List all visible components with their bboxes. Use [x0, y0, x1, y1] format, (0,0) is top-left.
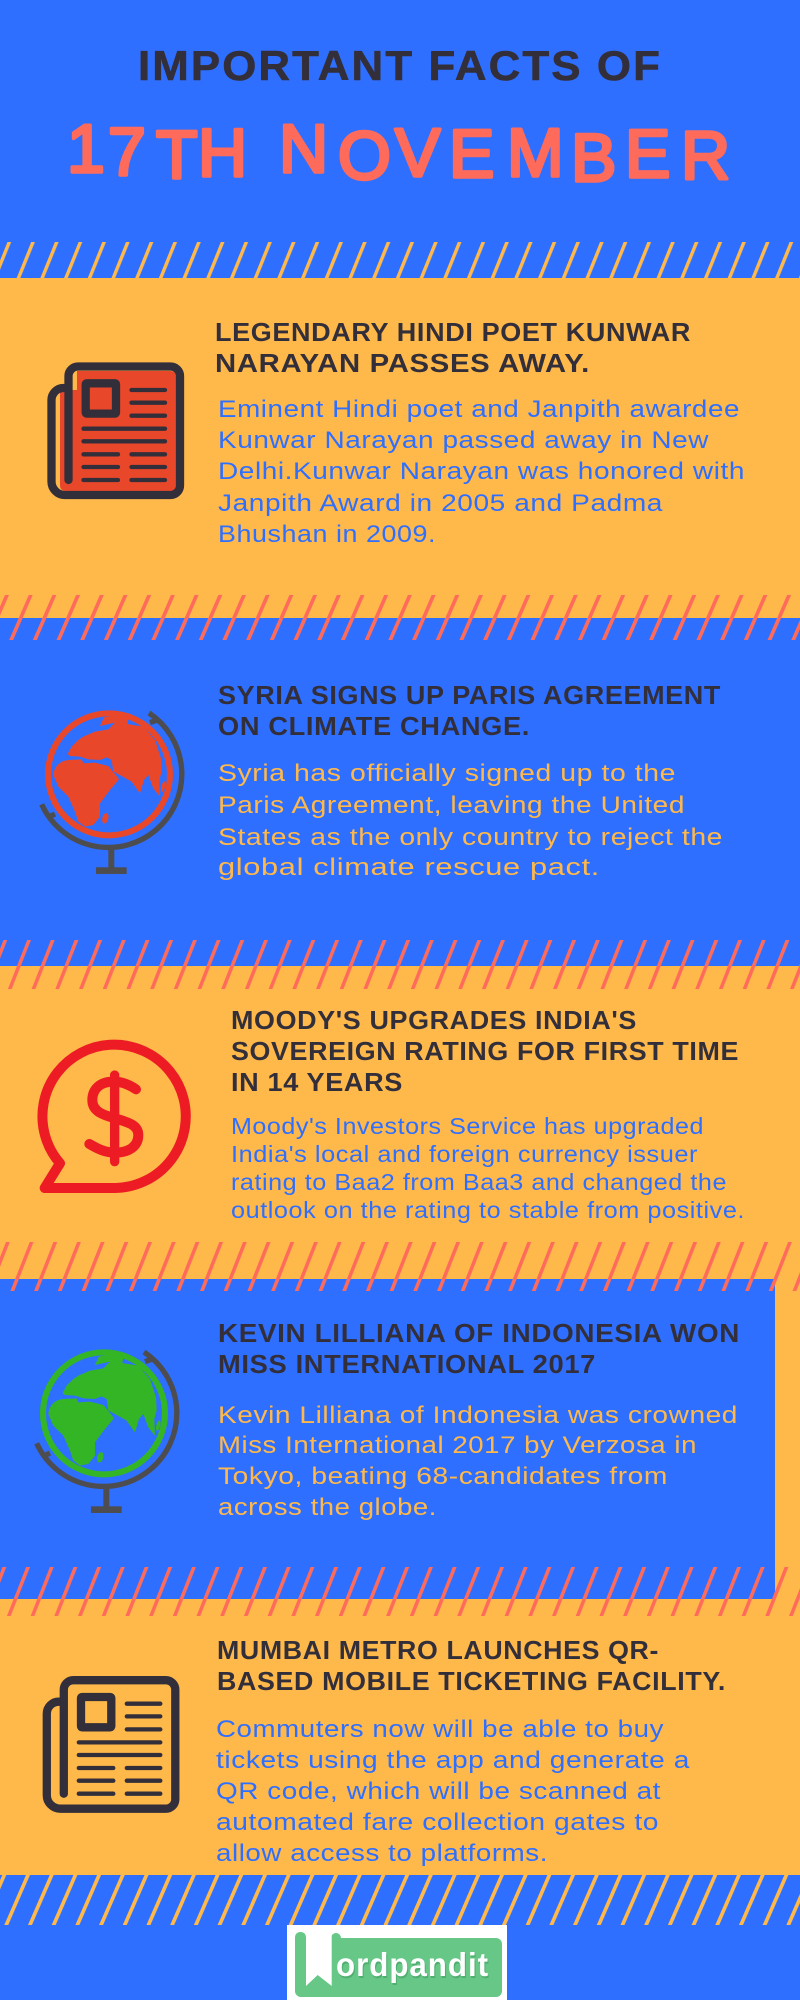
heading: [218, 682, 721, 741]
panel: mumbai metro: [0, 1599, 800, 1875]
body text: Moody's Investors Service has upgraded: [231, 1113, 704, 1139]
icon: dollar speech bubble: [42, 1045, 186, 1188]
body text: [218, 760, 723, 881]
body text: tickets using the app and generate a: [216, 1747, 690, 1774]
body text: outlook on the rating to stable from positive.: [231, 1197, 745, 1223]
icon: newspaper outline: [47, 1680, 175, 1809]
body text: States as the only country to reject the: [218, 824, 723, 851]
body text: across the globe.: [218, 1494, 437, 1521]
body text: [218, 1402, 738, 1521]
body text: [216, 1716, 690, 1867]
heading: [215, 319, 691, 378]
heading: ON CLIMATE CHANGE.: [218, 713, 530, 741]
heading: [217, 1637, 726, 1696]
body text: Bhushan in 2009.: [218, 521, 436, 548]
body text: Paris Agreement, leaving the United: [218, 792, 685, 819]
body text: India's local and foreign currency issuer: [231, 1141, 698, 1167]
heading: SYRIA SIGNS UP PARIS AGREEMENT: [218, 682, 721, 710]
title: important facts of: IMPORTANT FACTS OF: [138, 42, 662, 89]
body text: rating to Baa2 from Baa3 and changed the: [231, 1169, 727, 1195]
body text: Delhi.Kunwar Narayan was honored with: [218, 458, 745, 485]
heading: BASED MOBILE TICKETING FACILITY.: [217, 1668, 726, 1696]
body text: [218, 396, 745, 548]
heading: KEVIN LILLIANA OF INDONESIA WON: [218, 1320, 740, 1348]
body text: Eminent Hindi poet and Janpith awardee: [218, 396, 740, 423]
body text: Miss International 2017 by Verzosa in: [218, 1432, 697, 1459]
panel: kunwar narayan: [0, 278, 800, 618]
title: 17th november: 17TH NOVEMBER: [67, 111, 730, 196]
heading: MOODY'S UPGRADES INDIA'S: [231, 1007, 637, 1035]
heading: [218, 1320, 740, 1379]
panel: kevin lilliana: [37, 1279, 800, 1599]
heading: IN 14 YEARS: [231, 1069, 403, 1097]
logo: wordpandit: [287, 1925, 507, 2000]
body text: allow access to platforms.: [216, 1840, 548, 1867]
heading: [231, 1007, 739, 1097]
heading: MISS INTERNATIONAL 2017: [218, 1351, 596, 1379]
body text: Commuters now will be able to buy: [216, 1716, 664, 1743]
body text: Syria has officially signed up to the: [218, 760, 676, 787]
body text: Kunwar Narayan passed away in New: [218, 427, 709, 454]
heading: NARAYAN PASSES AWAY.: [215, 350, 590, 378]
icon: globe green: [37, 1352, 177, 1513]
heading: MUMBAI METRO LAUNCHES QR-: [217, 1637, 659, 1665]
logo: wordpandit: ordpandit: [336, 1946, 489, 1983]
icon: newspaper red: [52, 366, 180, 495]
panel: moody's upgrade: [0, 966, 800, 1279]
heading: LEGENDARY HINDI POET KUNWAR: [215, 319, 691, 347]
body text: Janpith Award in 2005 and Padma: [218, 490, 663, 517]
body text: Kevin Lilliana of Indonesia was crowned: [218, 1402, 738, 1429]
body text: [231, 1113, 745, 1223]
panel: syria paris agreement: [42, 682, 723, 881]
body text: Tokyo, beating 68-candidates from: [218, 1463, 668, 1490]
body text: QR code, which will be scanned at: [216, 1778, 661, 1805]
icon: globe red: [42, 713, 182, 874]
body text: global climate rescue pact.: [218, 854, 600, 881]
heading: SOVEREIGN RATING FOR FIRST TIME: [231, 1038, 739, 1066]
body text: automated fare collection gates to: [216, 1809, 659, 1836]
